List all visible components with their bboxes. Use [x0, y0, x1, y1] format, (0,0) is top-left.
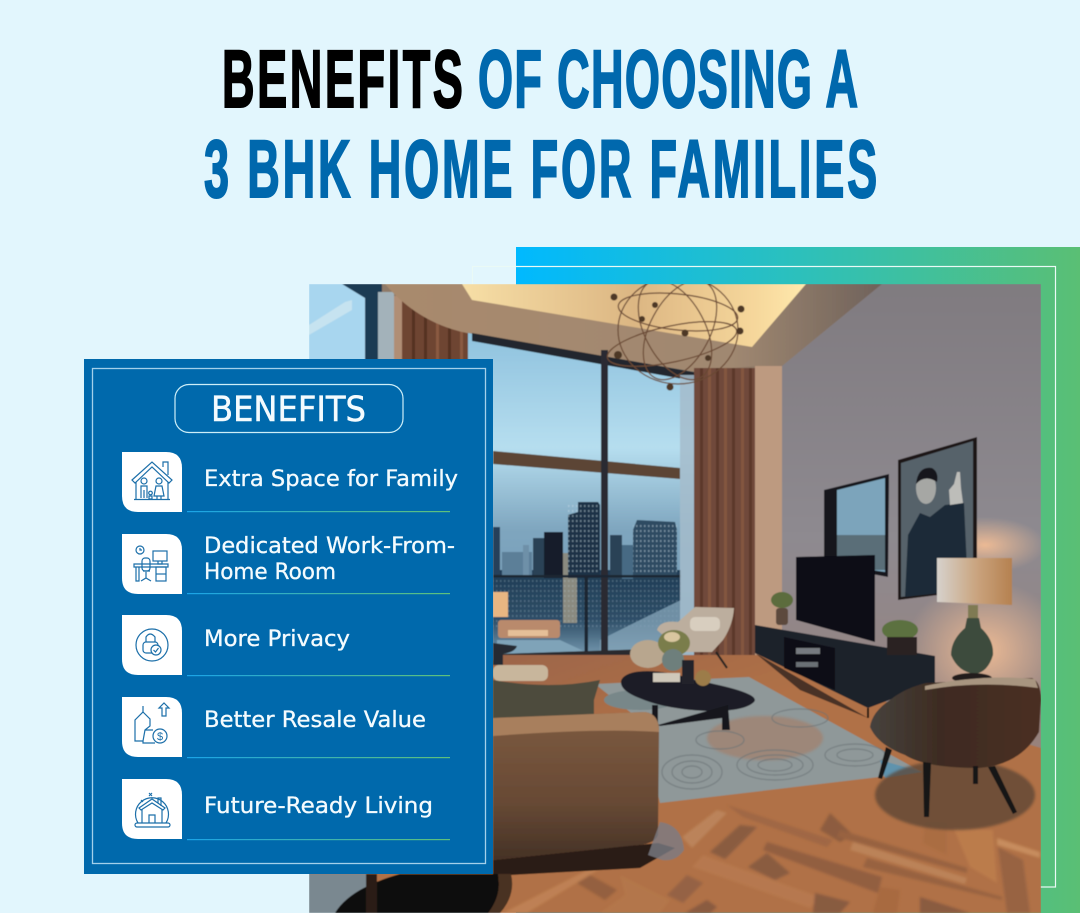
item: extra space for family	[122, 452, 458, 512]
plant right of TV	[882, 620, 918, 655]
icon: house with family	[122, 452, 182, 512]
title: 3 BHK HOME FOR FAMILIES	[204, 124, 877, 216]
divider	[187, 757, 450, 758]
window frames and balcony rail	[472, 333, 694, 660]
label: Future-Ready Living	[204, 794, 433, 819]
chandelier	[606, 284, 745, 391]
ceiling	[385, 284, 882, 372]
title: OF CHOOSING A	[478, 34, 858, 126]
sofa shadow and floor reflection	[493, 822, 684, 876]
label: Better Resale Value	[204, 708, 426, 733]
title: BENEFITS	[222, 34, 463, 126]
label: More Privacy	[204, 627, 350, 652]
title	[204, 34, 877, 216]
white outline frame	[472, 266, 1056, 887]
divider	[187, 511, 450, 512]
divider	[187, 593, 450, 594]
item: dedicated work-from-home room	[122, 534, 455, 594]
item: future-ready living	[122, 779, 450, 840]
plant left of TV	[771, 592, 793, 625]
item: more privacy	[122, 615, 450, 676]
window with sky	[468, 333, 694, 660]
lamp glow	[915, 591, 1041, 692]
bottom-left floor lamp and round table	[309, 874, 512, 913]
wall frame portrait	[898, 437, 977, 600]
icon: house in snow globe	[122, 779, 182, 839]
wall column	[755, 366, 782, 666]
benefits badge: BENEFITS	[211, 390, 366, 430]
wood floor	[309, 655, 1041, 913]
small lamp shade through window	[493, 592, 508, 617]
icon: price tags with dollar: $	[157, 731, 163, 743]
TV console	[755, 625, 935, 718]
coffee table	[621, 671, 755, 730]
label: Extra Space for Family	[204, 467, 458, 492]
sofa	[493, 712, 659, 860]
curtain	[694, 368, 755, 656]
cushions on sofa	[493, 665, 600, 720]
TV	[796, 555, 875, 642]
item: better resale value	[122, 697, 450, 758]
side table behind panel edge	[493, 643, 517, 665]
benefits panel	[84, 359, 493, 874]
table lamp	[937, 558, 1012, 683]
label: Dedicated Work-From-	[204, 534, 455, 559]
panel inner border	[92, 368, 486, 864]
far-left window and curtain	[309, 284, 472, 364]
foreground chair	[870, 678, 1041, 830]
base wall tone	[381, 284, 756, 850]
benefits badge	[175, 384, 403, 432]
divider	[187, 839, 450, 840]
wall frame small	[824, 474, 889, 577]
herringbone planks	[503, 805, 1040, 913]
flowers and books on table	[653, 630, 711, 686]
icon: price tags with dollar	[122, 697, 182, 757]
ceiling cove light	[462, 284, 806, 347]
photo: living room interior	[309, 268, 1065, 913]
icon: desk and chair	[122, 534, 182, 594]
far armchair and ottoman	[630, 607, 734, 668]
icon: padlock in circle	[122, 615, 182, 675]
right wall	[782, 284, 1041, 790]
label: Home Room	[204, 560, 336, 585]
divider	[187, 675, 450, 676]
label	[204, 534, 455, 585]
city skyline	[493, 502, 681, 654]
rug	[595, 677, 922, 803]
gradient backdrop panel	[516, 247, 1080, 913]
